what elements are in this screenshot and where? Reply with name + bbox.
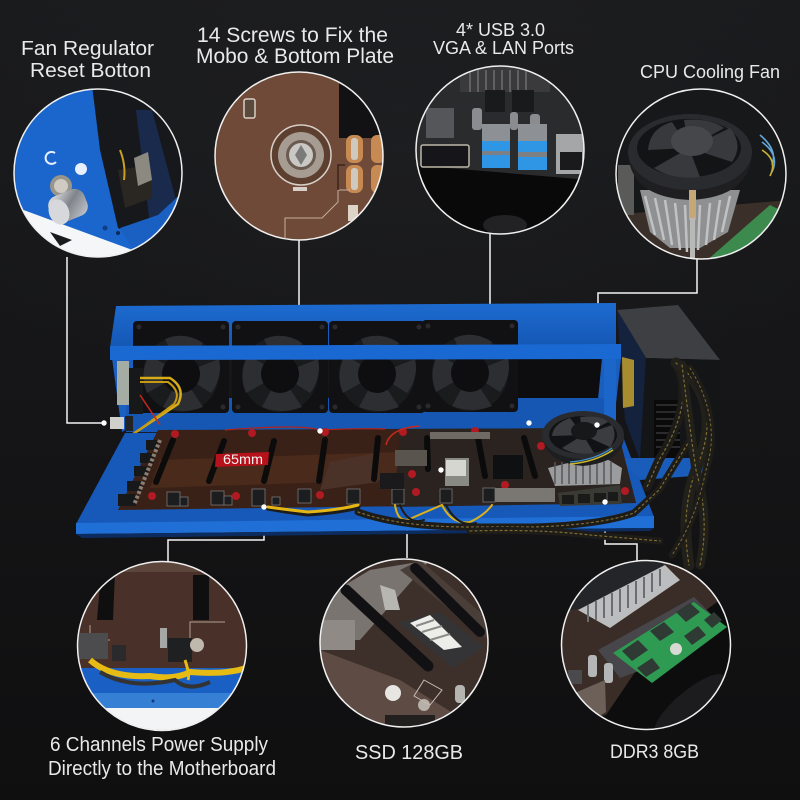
- circle: usb vga lan ports: [417, 66, 584, 232]
- heading: screws: 14 Screws to Fix the: [197, 24, 388, 47]
- expansion slots: [156, 438, 535, 482]
- heading: screws: [196, 24, 394, 68]
- rack: cross bar: [110, 344, 621, 360]
- heading: fan regulator: [21, 37, 154, 82]
- label: 65mm: 65mm: [223, 451, 263, 467]
- psu: [617, 305, 720, 461]
- motherboard: [118, 426, 636, 510]
- rack: back panel: [110, 303, 621, 440]
- circle: fan regulator closeup: [14, 90, 178, 256]
- chipset and components: [493, 455, 523, 479]
- circle outline 6: [320, 559, 488, 727]
- power connectors: [167, 488, 495, 506]
- rack: floor plate: [76, 429, 708, 538]
- left vrm connectors: [118, 440, 158, 506]
- circle outline 4: [616, 89, 786, 259]
- circle outline 2: [215, 72, 383, 240]
- heading: ports: 4* USB 3.0: [456, 20, 545, 40]
- cpu cooler: [542, 411, 624, 486]
- heading: ports: [433, 20, 574, 58]
- circle: power supply closeup: [74, 558, 250, 734]
- braided black cables: [358, 363, 711, 565]
- caption: ddr3: DDR3 8GB: [610, 742, 699, 763]
- heading: ports: VGA & LAN Ports: [433, 38, 574, 58]
- connector lines: [67, 234, 697, 562]
- ram: [558, 485, 622, 506]
- red screw markers: [148, 427, 629, 500]
- heading: fan regulator: Reset Botton: [30, 59, 151, 82]
- circle outline 1: [14, 89, 182, 257]
- circle outline 7: [562, 560, 730, 730]
- heading: screws: Mobo & Bottom Plate: [196, 45, 394, 68]
- circle: ssd closeup: [316, 555, 492, 731]
- caption: ssd: SSD 128GB: [355, 741, 463, 764]
- caption: power supply: [48, 734, 276, 780]
- circle: screw closeup: [216, 72, 382, 240]
- fans: [133, 320, 518, 413]
- connector end dots: [101, 420, 608, 510]
- yellow power cables: [268, 505, 492, 524]
- circle outline 5: [78, 562, 246, 730]
- fan control board and wires: [110, 361, 181, 438]
- caption: power supply: 6 Channels Power Supply: [50, 734, 268, 756]
- circle: cpu cooling fan: [618, 114, 780, 258]
- heading: fan regulator: Fan Regulator: [21, 37, 154, 60]
- circle outline 3: [416, 66, 584, 234]
- circle: ddr3 closeup: [562, 561, 727, 728]
- caption: power supply: Directly to the Motherboard: [48, 758, 276, 780]
- heading: cpu cooling fan: CPU Cooling Fan: [640, 62, 780, 82]
